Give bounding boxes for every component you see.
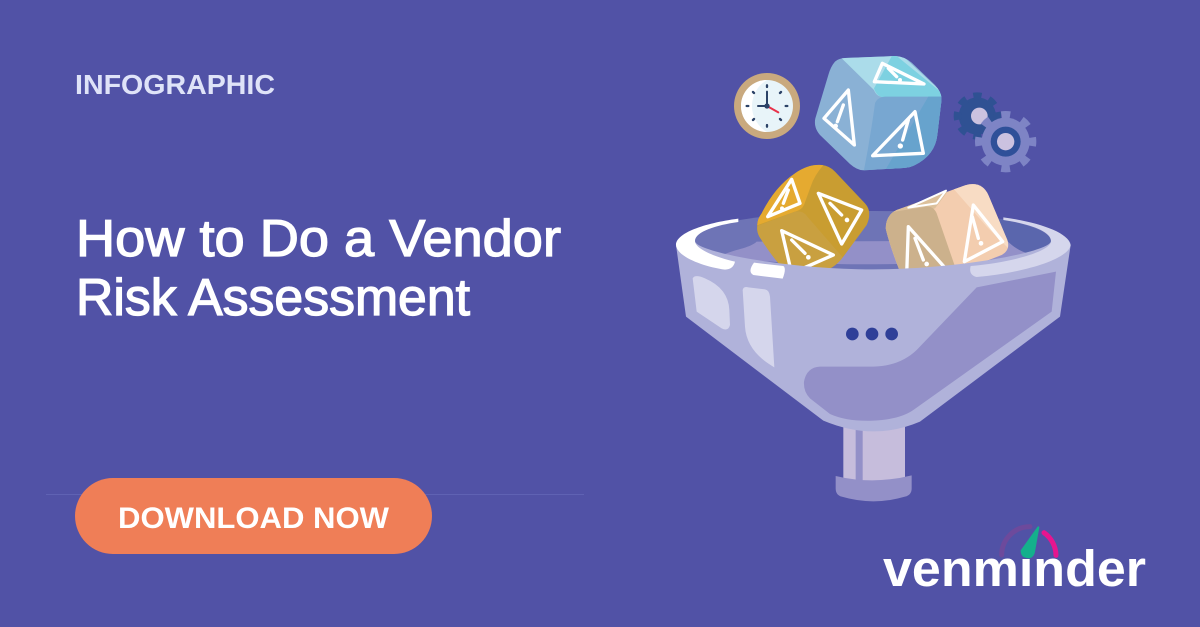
infographic canvas — [46, 56, 1146, 586]
logo gauge — [1002, 527, 1056, 557]
title — [76, 210, 561, 327]
title: Risk Assessment — [76, 269, 471, 327]
body reflections — [693, 276, 774, 367]
eyebrow label: INFOGRAPHIC — [75, 69, 275, 100]
download button — [75, 478, 432, 554]
blue risk die — [814, 56, 942, 170]
venminder logo: venminder — [883, 540, 1146, 597]
gold risk die — [757, 164, 870, 268]
peach risk die — [886, 184, 1008, 269]
funnel front — [676, 217, 1071, 501]
icon: gears — [957, 96, 1032, 168]
title: How to Do a Vendor — [76, 210, 561, 268]
download button: DOWNLOAD NOW — [118, 502, 390, 535]
rim highlights — [676, 217, 1071, 279]
funnel body — [676, 241, 1071, 431]
funnel shadow band — [804, 272, 1056, 421]
funnel back: rim and interior — [676, 211, 1071, 279]
funnel stem — [836, 423, 912, 501]
icon: clock — [734, 73, 800, 139]
three dots — [846, 328, 898, 340]
